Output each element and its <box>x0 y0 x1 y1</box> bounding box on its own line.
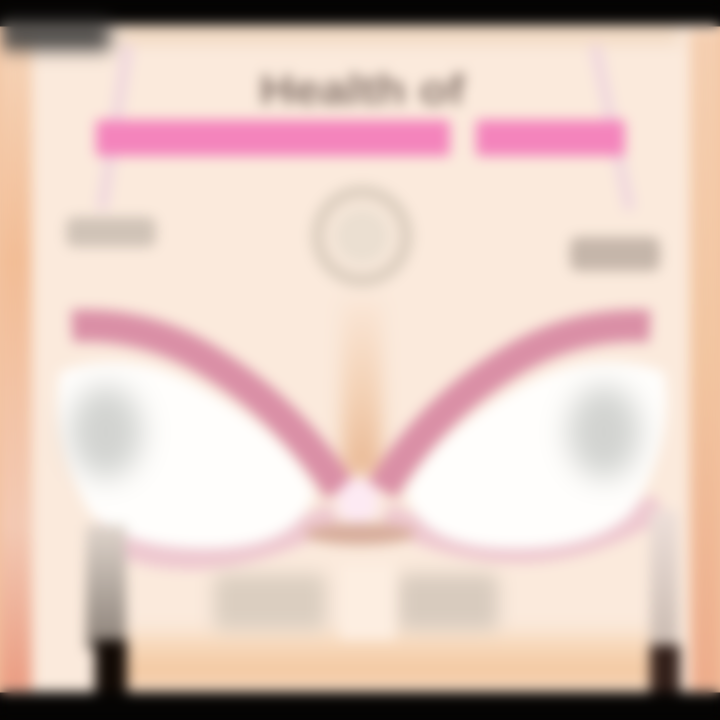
label block: upper right <box>570 237 660 271</box>
right white lobe <box>406 362 667 548</box>
left pink arc <box>72 326 340 490</box>
left lobe halo <box>95 515 335 557</box>
left grey column <box>86 525 126 650</box>
title: Health of <box>260 66 466 113</box>
label block: bottom left <box>214 574 326 630</box>
label block: upper left <box>66 217 156 247</box>
centre brown arc <box>305 523 415 545</box>
circular icon: top centre <box>318 192 406 280</box>
right grey blob <box>568 386 640 478</box>
top-left dark corner <box>0 22 110 50</box>
left white lobe <box>57 362 314 548</box>
left margin <box>0 30 32 690</box>
central vertical line <box>342 300 382 475</box>
centre drop <box>338 478 378 526</box>
right pink arc <box>382 326 650 490</box>
bottom black border <box>0 692 720 720</box>
left grey blob <box>70 386 142 478</box>
heading highlight: second word <box>476 120 625 156</box>
top peach edge <box>120 28 680 40</box>
left black post <box>95 640 127 720</box>
top black border <box>0 0 720 25</box>
right dark post <box>650 645 680 715</box>
label block: bottom right <box>398 574 498 630</box>
right margin <box>690 30 720 690</box>
decorative side straps <box>102 45 630 210</box>
right lobe halo <box>385 505 660 550</box>
centre light column <box>340 565 395 640</box>
bottom peach band <box>110 632 660 687</box>
heading highlight: first word <box>96 120 450 156</box>
right grey column <box>650 510 678 650</box>
